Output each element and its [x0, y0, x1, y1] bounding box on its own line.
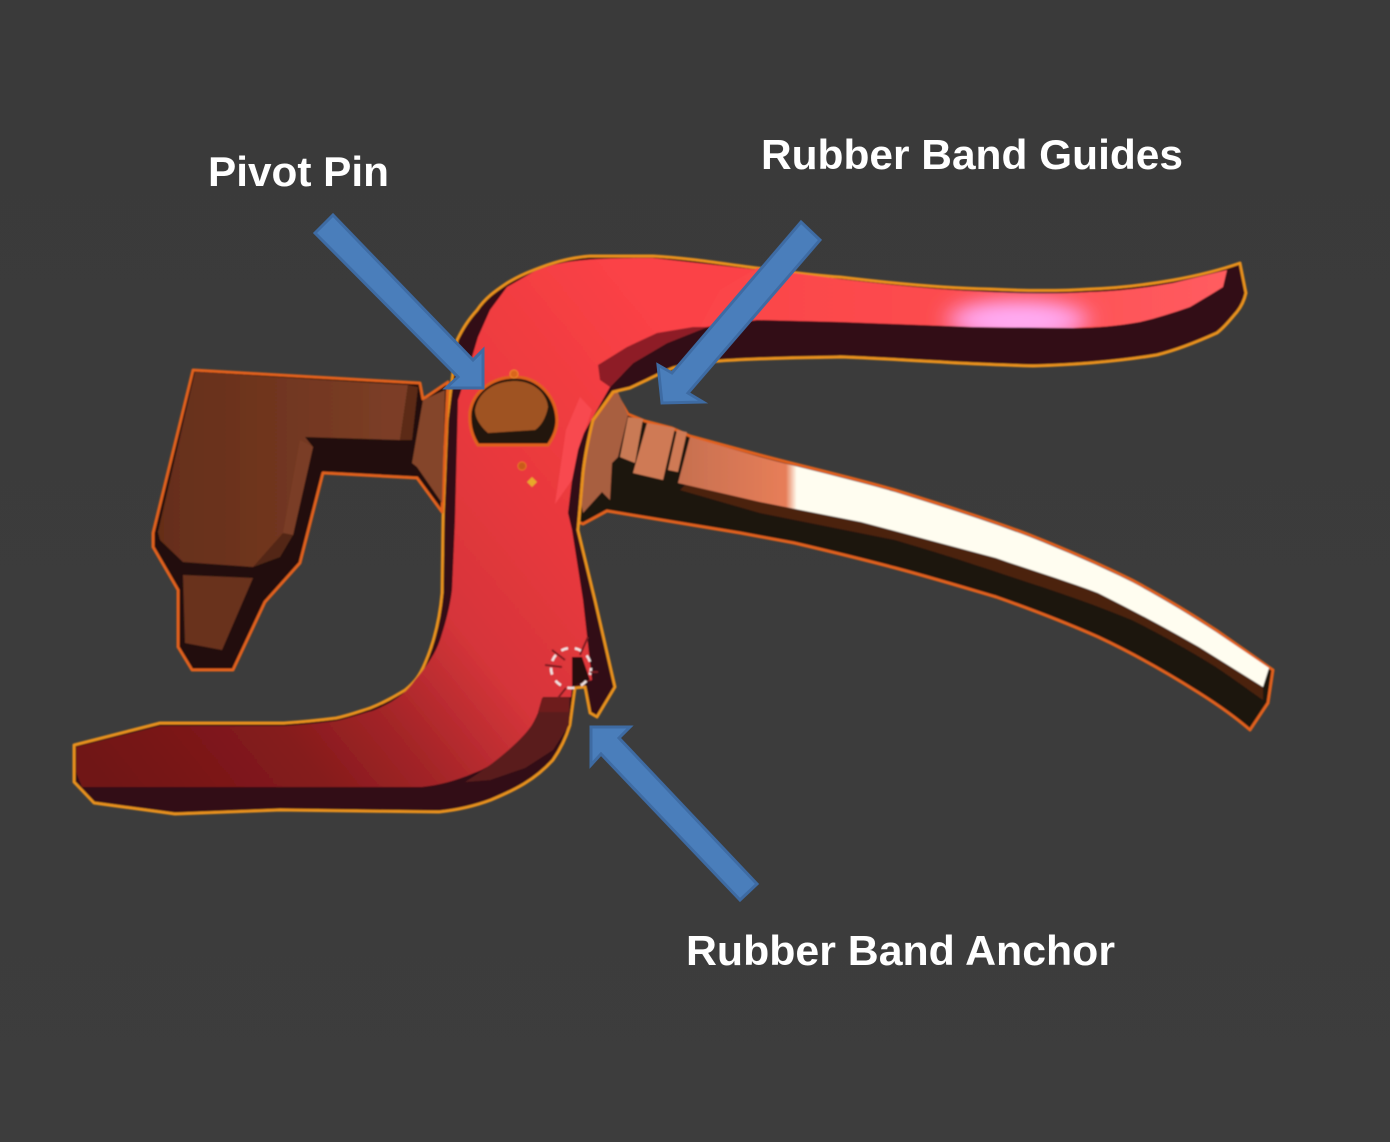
label: pivot pin: Pivot Pin: [208, 148, 389, 195]
arrow: rubber band anchor: [591, 727, 757, 900]
bright facets near inner bend: [555, 397, 592, 504]
upper handle face: [700, 268, 1227, 328]
main lever face: [76, 258, 760, 787]
highlight: pink sheen on upper handle: [946, 302, 1090, 338]
infographic: labelled trigger mechanism diagram: [72, 138, 1276, 966]
anchor notch: [572, 657, 590, 687]
anchor target marker: [545, 637, 598, 698]
upper handle and main lever silhouette: [74, 256, 1246, 814]
lower handle: [578, 390, 1273, 730]
label: rubber band anchor: Rubber Band Anchor: [686, 927, 1115, 974]
shaded facets on inner bend: [598, 327, 707, 387]
pivot pin: [470, 377, 557, 445]
arrow: pivot pin: [315, 215, 483, 388]
label: rubber band guides: Rubber Band Guides: [761, 131, 1183, 178]
side wall band of lever foot: [465, 697, 570, 782]
brown jaw piece: [153, 370, 448, 670]
step shade near anchor: [538, 698, 569, 712]
pin marker dots: [510, 370, 537, 487]
trigger assembly: [74, 256, 1273, 814]
arrow: rubber band guides: [658, 222, 820, 403]
